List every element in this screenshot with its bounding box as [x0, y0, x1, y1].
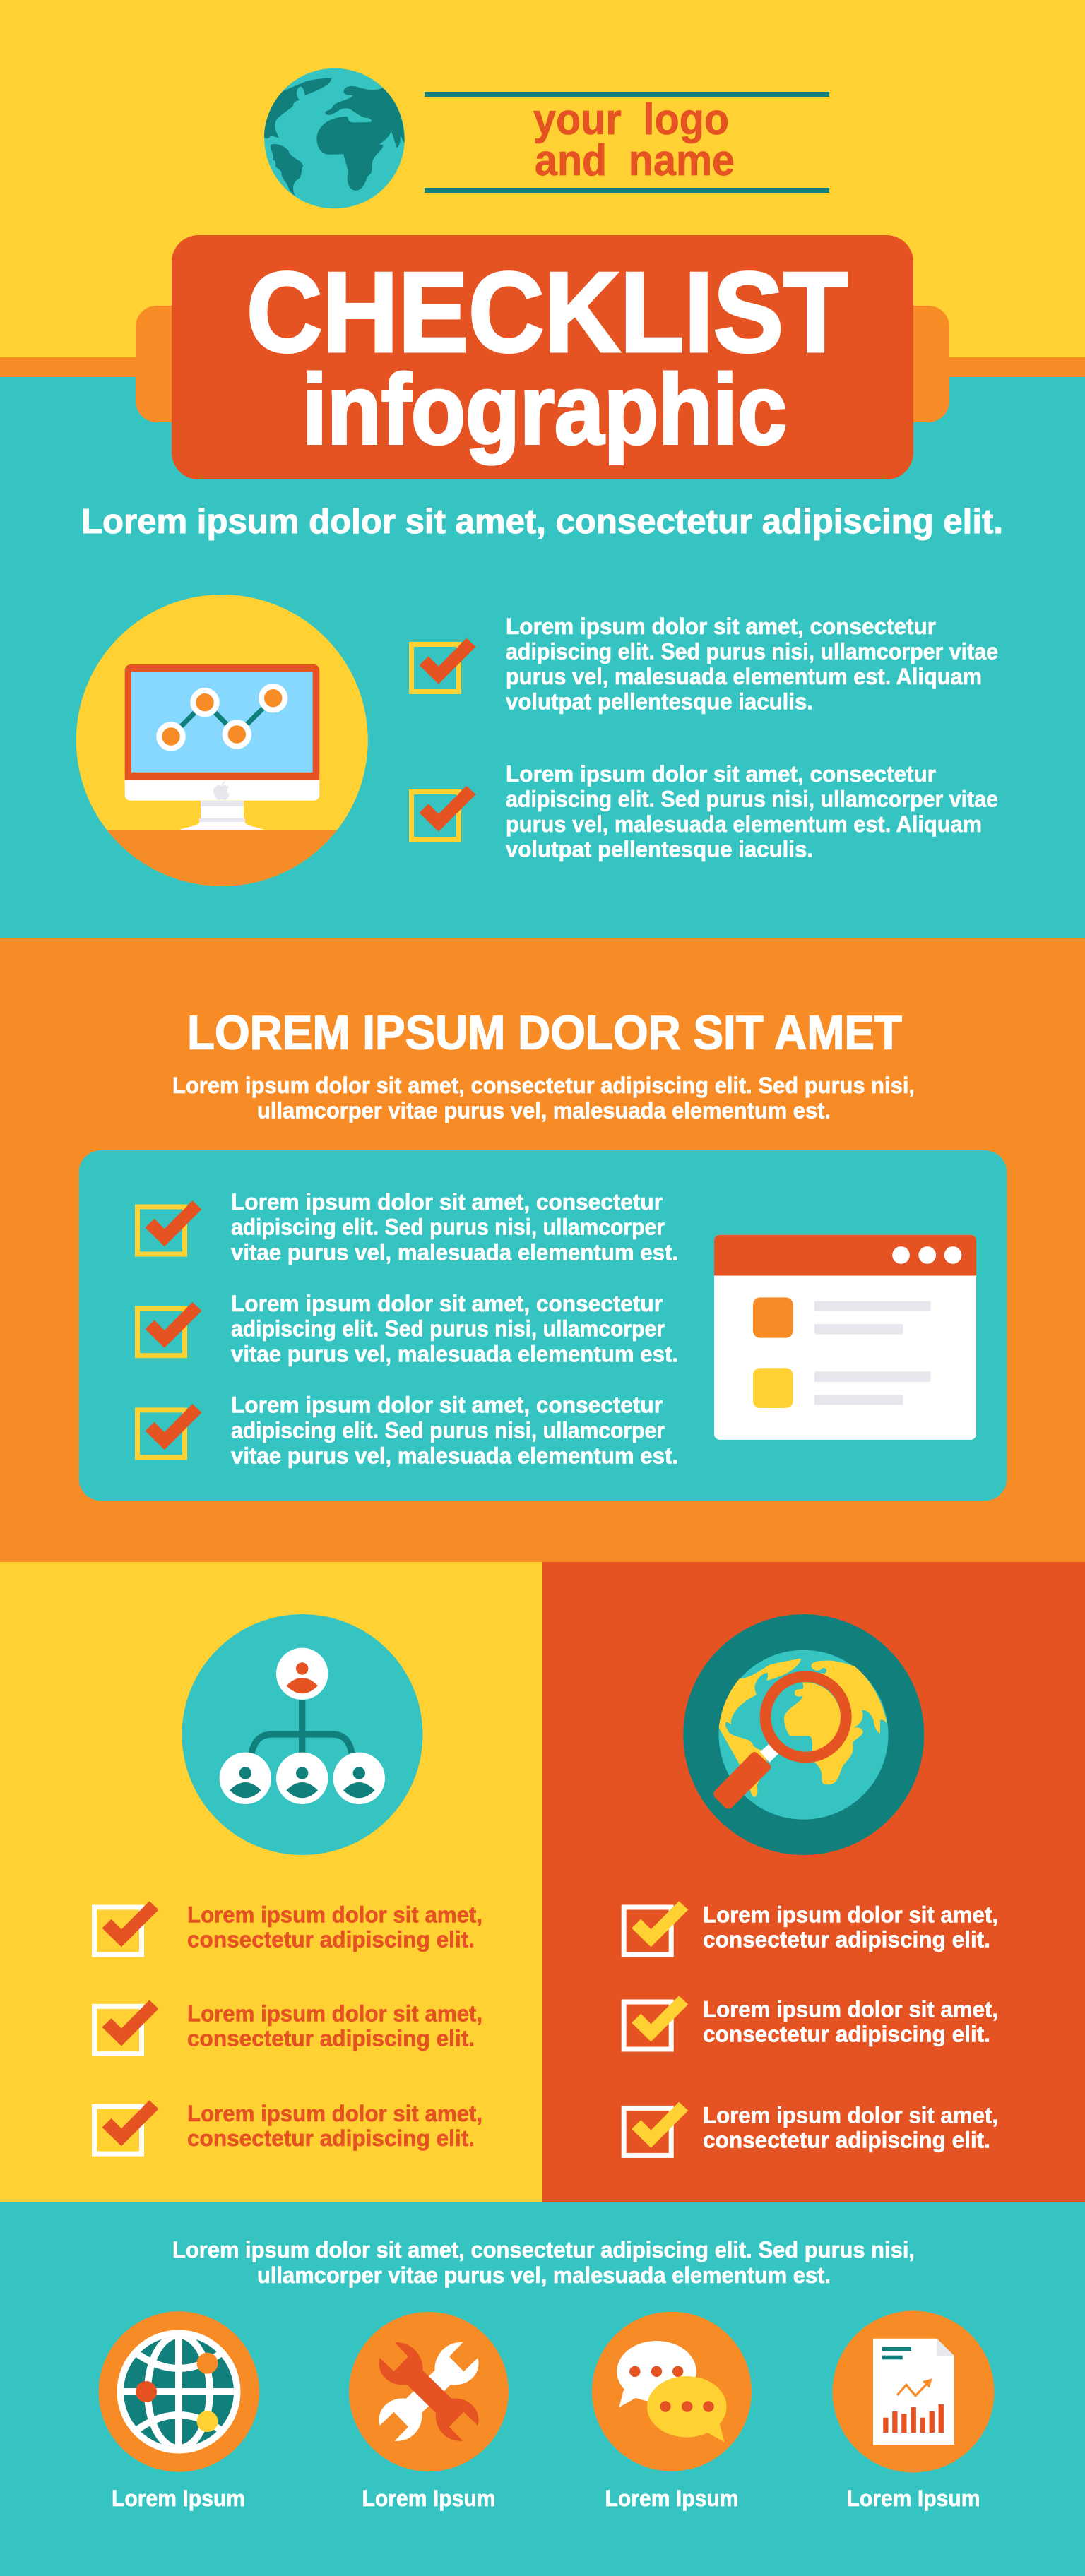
icon: chat bubbles [592, 2312, 752, 2471]
checklist item 2 [95, 2000, 482, 2053]
checklist item 2: Lorem ipsum dolor sit amet, [703, 1997, 998, 2022]
footer intro text: ullamcorper vitae purus vel, malesuada elementum est. [257, 2262, 831, 2288]
checklist item 1: consectetur adipiscing elit. [703, 1926, 990, 1952]
icon: team hierarchy [182, 1614, 422, 1855]
item text: adipiscing elit. Sed purus nisi, ullamcorper vitae [506, 786, 998, 811]
logo text [533, 95, 735, 185]
item text [506, 614, 998, 715]
checklist item 1: vitae purus vel, malesuada elementum est. [231, 1240, 678, 1265]
checklist item 2: consectetur adipiscing elit. [187, 2025, 475, 2051]
checklist item 2: vitae purus vel, malesuada elementum est. [231, 1342, 678, 1367]
item text: adipiscing elit. Sed purus nisi, ullamcorper vitae [506, 638, 998, 664]
icon: logo globe [264, 68, 405, 208]
checklist item 1 [137, 1189, 678, 1265]
checklist item 1 [95, 1901, 482, 1955]
checklist item: intro 1 [411, 614, 998, 715]
checklist item 3 [95, 2100, 482, 2154]
icon: browser window [714, 1235, 976, 1440]
logo rule: bottom [425, 188, 829, 193]
section intro text [172, 1073, 915, 1123]
checklist item 3: consectetur adipiscing elit. [187, 2125, 475, 2151]
checkbox [411, 786, 476, 839]
footer intro text: Lorem ipsum dolor sit amet, consectetur adipiscing elit. Sed purus nisi, [172, 2237, 915, 2262]
checklist item 2: Lorem ipsum dolor sit amet, [187, 2001, 482, 2027]
title: checklist: CHECKLIST [247, 249, 848, 376]
checklist item 2: adipiscing elit. Sed purus nisi, ullamcorper [231, 1316, 665, 1342]
checklist item 2 [137, 1291, 678, 1367]
item text [506, 761, 998, 861]
section heading: LOREM IPSUM DOLOR SIT AMET [187, 1006, 902, 1059]
subtitle: Lorem ipsum dolor sit amet, consectetur adipiscing elit. [81, 503, 1003, 541]
checklist item 3 [624, 2102, 998, 2155]
item text: Lorem ipsum dolor sit amet, consectetur [506, 614, 936, 639]
label: crossed wrenches: Lorem Ipsum [362, 2486, 496, 2511]
checklist item 3: vitae purus vel, malesuada elementum est. [231, 1443, 678, 1469]
checklist item 3: Lorem ipsum dolor sit amet, [187, 2101, 482, 2126]
checklist item 3: Lorem ipsum dolor sit amet, consectetur [231, 1393, 663, 1418]
icon: report document [832, 2310, 995, 2473]
checklist item 2: Lorem ipsum dolor sit amet, consectetur [231, 1291, 663, 1316]
panel: orange section [0, 938, 1085, 1562]
logo rule: top [425, 92, 829, 97]
icon: globe with magnifier [683, 1614, 924, 1855]
checklist item 1: Lorem ipsum dolor sit amet, consectetur [231, 1189, 663, 1215]
title banner side tabs [136, 306, 949, 422]
item text: Lorem ipsum dolor sit amet, consectetur [506, 761, 936, 787]
icon: monitor with line chart [76, 595, 368, 886]
item text: volutpat pellentesque iaculis. [506, 836, 813, 861]
section intro text: ullamcorper vitae purus vel, malesuada elementum est. [257, 1098, 831, 1123]
label: chat bubbles: Lorem Ipsum [605, 2486, 739, 2511]
checklist item: intro 2 [411, 761, 998, 861]
logo text: and name [535, 136, 735, 185]
checklist item 3: consectetur adipiscing elit. [703, 2127, 990, 2152]
checklist item 1 [624, 1901, 998, 1955]
checklist item 1: adipiscing elit. Sed purus nisi, ullamcorper [231, 1215, 665, 1240]
item text: purus vel, malesuada elementum est. Aliquam [506, 664, 982, 689]
panel: red column [542, 1562, 1085, 2202]
item text: purus vel, malesuada elementum est. Aliquam [506, 811, 982, 837]
logo text: your logo [533, 95, 729, 144]
title banner [172, 235, 913, 479]
checklist item 1: Lorem ipsum dolor sit amet, [703, 1902, 998, 1928]
checklist item 2: consectetur adipiscing elit. [703, 2021, 990, 2046]
icon: crossed wrenches [349, 2312, 509, 2471]
checklist item 3: Lorem ipsum dolor sit amet, [703, 2103, 998, 2128]
checkbox [411, 638, 476, 692]
checklist item 1: Lorem ipsum dolor sit amet, [187, 1902, 482, 1928]
label: network globe: Lorem Ipsum [112, 2486, 245, 2511]
checklist item 3 [137, 1393, 678, 1469]
title: infographic: infographic [302, 354, 787, 465]
panel: footer background [0, 2202, 1085, 2576]
item text: volutpat pellentesque iaculis. [506, 689, 813, 715]
checklist item 1: consectetur adipiscing elit. [187, 1926, 475, 1952]
checklist item 2 [624, 1996, 998, 2049]
panel: teal checklist card [79, 1150, 1007, 1501]
footer intro text [172, 2237, 915, 2288]
panel: yellow column [0, 1562, 542, 2202]
checklist item 3: adipiscing elit. Sed purus nisi, ullamcorper [231, 1418, 665, 1443]
header background [0, 0, 1085, 938]
label: report document: Lorem Ipsum [846, 2486, 980, 2511]
section intro text: Lorem ipsum dolor sit amet, consectetur adipiscing elit. Sed purus nisi, [172, 1073, 915, 1098]
icon: network globe [99, 2311, 259, 2472]
